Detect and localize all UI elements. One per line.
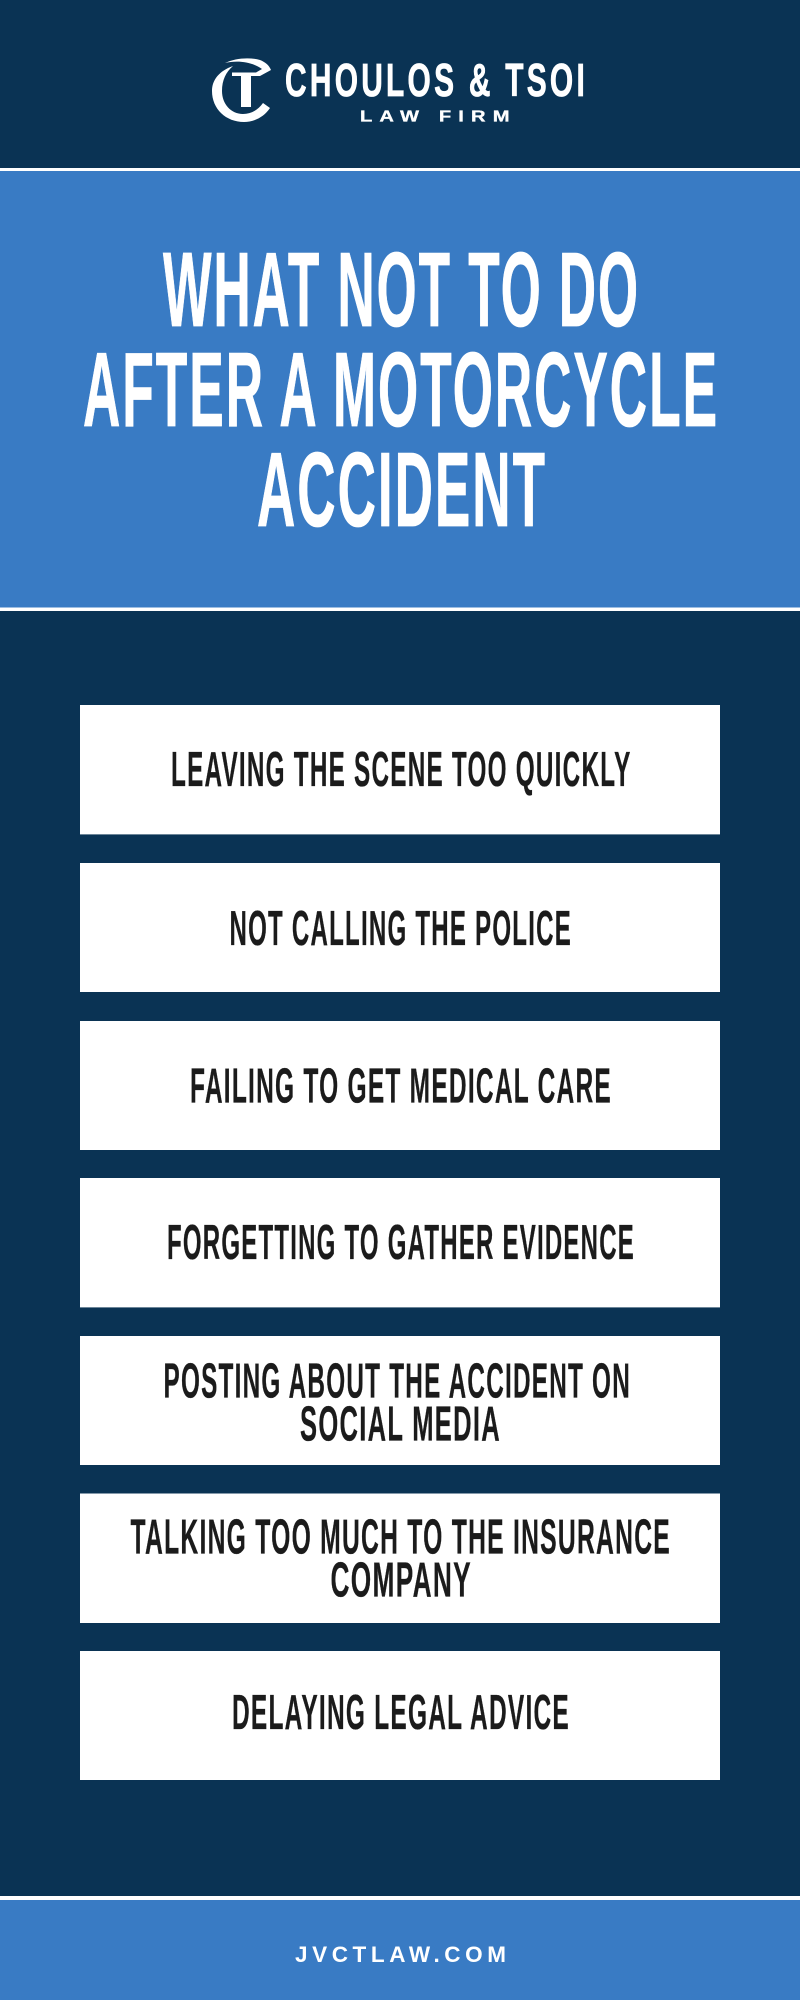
logo name: CHOULOS & TSOI — [285, 54, 588, 106]
item 6 — [80, 1494, 720, 1623]
footer — [0, 1896, 800, 2000]
item 3 — [80, 1021, 720, 1150]
title — [83, 231, 719, 549]
website: JVCTLAW.COM — [295, 1942, 506, 1967]
item 5: SOCIAL MEDIA — [300, 1397, 501, 1452]
logo: Choulos & Tsoi Law Firm — [212, 54, 588, 125]
item 2 — [80, 863, 720, 992]
item 7 — [80, 1651, 720, 1780]
item 6: COMPANY — [330, 1553, 472, 1608]
item 5 — [80, 1336, 720, 1465]
title panel — [0, 168, 800, 611]
icon: CT monogram — [212, 58, 271, 122]
item 1 — [80, 705, 720, 834]
list of mistakes — [80, 705, 720, 1780]
logo tagline: LAW FIRM — [360, 108, 510, 125]
item 4 — [80, 1178, 720, 1307]
